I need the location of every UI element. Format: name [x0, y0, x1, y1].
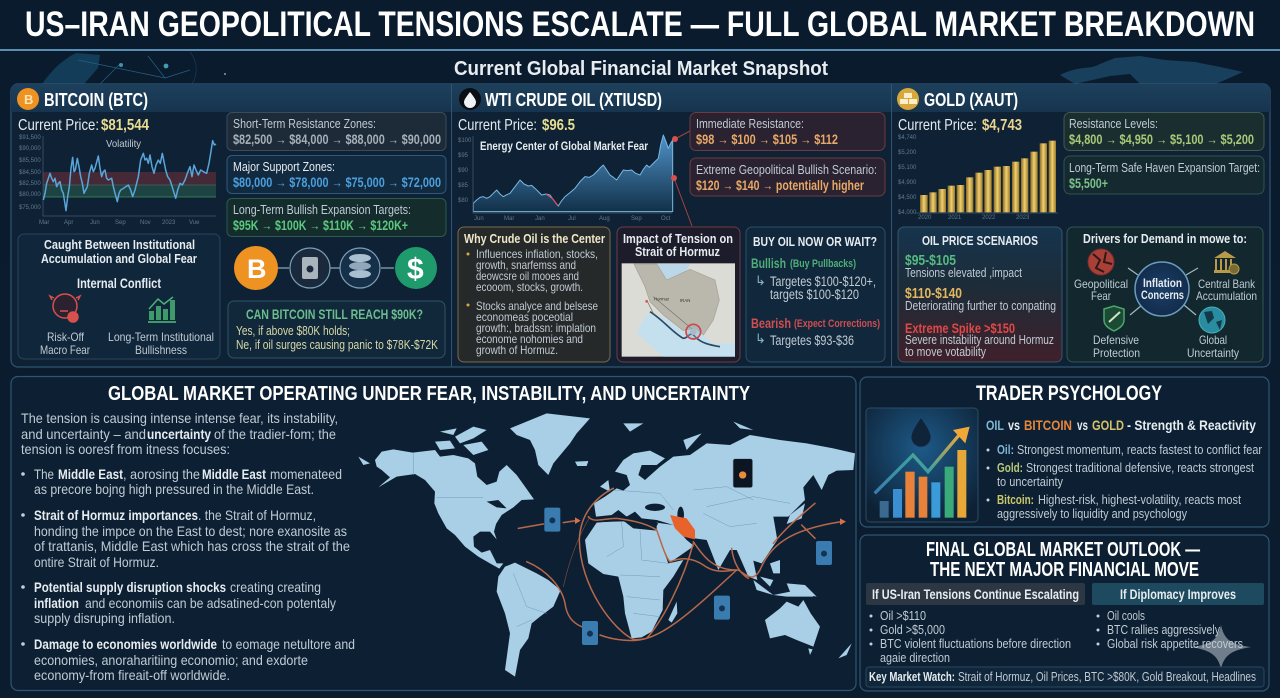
- area chart: crude oil: $95: [458, 153, 469, 159]
- callout: can bitcoin reach 90k: [228, 301, 445, 358]
- comparison heading: vs: [1077, 417, 1088, 433]
- bullets: asset reactivity: Oil:: [997, 443, 1014, 457]
- callout: immediate resistance: $98 → $100 → $105 → $112: [696, 132, 838, 147]
- icon: central bank: Central Bank: [1198, 277, 1256, 291]
- panel: internal conflict: Bullishness: [135, 343, 187, 357]
- inflation concerns hub: Inflation: [1143, 278, 1182, 290]
- text block: tension analysis: uncertainty: [147, 426, 211, 442]
- text block: tension analysis: creating creating: [230, 579, 321, 595]
- comparison heading: GOLD: [1092, 417, 1124, 433]
- section heading: Current Global Financial Market Snapshot: [454, 58, 828, 80]
- current price gold: $4,743: [982, 117, 1022, 134]
- panel: why crude oil is the center: Influences infiation, stocks,: [476, 247, 598, 261]
- line chart: bitcoin: Apr: [64, 220, 73, 226]
- inflation concerns hub: [1135, 262, 1189, 316]
- line chart: bitcoin: Vue: [189, 220, 200, 226]
- icon: global uncertainty earth: Uncertainty: [1187, 346, 1239, 360]
- panel: internal conflict: [18, 234, 220, 359]
- callout: major support: Major Support Zones:: [233, 160, 335, 174]
- current price bitcoin: $81,544: [101, 117, 149, 134]
- text block: tension analysis: and uncertainty – and: [21, 426, 146, 442]
- area chart: crude oil: Mar: [504, 216, 514, 222]
- text block: tension analysis: momenateed: [270, 466, 342, 482]
- world map with oil routes: [358, 413, 855, 677]
- panel: why crude oil is the center: growth of Hormuz.: [476, 343, 558, 357]
- panel: trader psychology: [860, 377, 1269, 527]
- panel: oil price scenarios: [898, 227, 1062, 362]
- line chart: bitcoin: $75,000: [19, 205, 41, 211]
- heading: outlook: THE NEXT MAJOR FINANCIAL MOVE: [930, 559, 1199, 581]
- panel: impact on strait of hormuz: [617, 227, 740, 362]
- comparison heading: [986, 417, 1256, 433]
- text block: tension analysis: Middle East: [58, 466, 123, 482]
- text block: tension analysis: . the Strait of Hormuz,: [198, 507, 316, 523]
- panel: global market operating under fear: [11, 376, 856, 690]
- line chart: bitcoin: Mar: [39, 220, 49, 226]
- icon: global uncertainty earth: [1187, 307, 1239, 360]
- panel: internal conflict: Macro Fear: [40, 343, 90, 357]
- panel: buy oil now or wait: (Expect Corrections): [794, 318, 880, 330]
- text block: tension analysis: inflation: [34, 595, 79, 611]
- heading: bitcoin: BITCOIN (BTC): [44, 90, 148, 110]
- panel: buy oil now or wait: BUY OIL NOW OR WAIT?: [753, 234, 877, 249]
- panel: oil price scenarios: Deteriorating further to conpating: [905, 299, 1056, 313]
- current price gold: Current Price:: [898, 117, 977, 134]
- panel: crude oil: [458, 88, 885, 362]
- icon: defensive shield: Defensive: [1093, 333, 1139, 347]
- bullets: asset reactivity: Gold:: [997, 461, 1023, 475]
- decorative world map top right: [1060, 56, 1243, 84]
- callout: bullish targets: Long-Term Bullish Expansion Targets:: [233, 203, 411, 217]
- comparison heading: OIL: [986, 417, 1004, 433]
- oil shipping routes: [518, 488, 842, 641]
- text block: tension analysis: of trattanis, Middle East which has cross the strait of the: [34, 538, 350, 554]
- panel: oil price scenarios: to move votability: [905, 345, 987, 359]
- scenario: diplomacy improves: BTC rallies aggressively: [1107, 623, 1221, 637]
- callout: major support: [227, 156, 446, 194]
- area chart: crude oil: $85: [458, 183, 469, 189]
- scenario: tensions escalate: BTC violent fluctuations before direction: [880, 637, 1071, 651]
- panel: buy oil now or wait: targets $100-$120: [770, 287, 859, 302]
- bar chart: gold: 2023: [1016, 215, 1030, 221]
- panel: impact on strait of hormuz: Strait of Hormuz: [635, 244, 720, 259]
- panel: gold: [897, 88, 1264, 362]
- panel: oil price scenarios: $95-$105: [905, 253, 956, 269]
- panel: why crude oil is the center: deowcsre oil mooes and: [476, 269, 579, 283]
- line chart: bitcoin: Volatility: [106, 138, 142, 150]
- icon: bullish bars: [148, 297, 176, 323]
- icon: geopolitical fear globe: Fear: [1091, 289, 1111, 303]
- icon: oil drop: [459, 88, 481, 110]
- text block: tension analysis: The tension is causing intense intense fear, its instability,: [21, 410, 338, 426]
- scenario: tensions escalate: [866, 583, 1085, 665]
- panel: buy oil now or wait: ↳: [755, 331, 766, 346]
- callout: bullish targets: $95K → $100K → $110K → $120K+: [233, 218, 408, 233]
- heading: crude oil: WTI CRUDE OIL (XTIUSD): [485, 90, 662, 110]
- current price oil: $96.5: [542, 117, 575, 134]
- area chart: crude oil: $90: [458, 168, 469, 174]
- text block: tension analysis: honding the impce on the East to dest; nore exanosite as: [34, 523, 347, 539]
- scenario: tensions escalate: If US-Iran Tensions Continue Escalating: [872, 587, 1079, 602]
- bullets: asset reactivity: Bitcoin:: [997, 493, 1034, 507]
- icon: gold bars: [897, 88, 919, 110]
- heading: gold: GOLD (XAUT): [924, 90, 1018, 110]
- bar chart: gold: $5,100: [898, 165, 917, 171]
- panel: internal conflict: Risk-Off: [47, 330, 85, 344]
- heading: global market: GLOBAL MARKET OPERATING UNDER FEAR, INSTABILITY, AND UNCERTAINTY: [108, 382, 750, 405]
- panel: buy oil now or wait: Bullish: [751, 255, 786, 271]
- bullets: asset reactivity: to uncertainty: [997, 475, 1064, 489]
- scenario: tensions escalate: Gold >$5,000: [880, 623, 945, 637]
- panel: buy oil now or wait: Targetes $93-$36: [770, 333, 854, 348]
- panel: buy oil now or wait: Targetes $100-$120+,: [770, 274, 876, 289]
- panel: why crude oil is the center: ecooom, stocks, growth.: [476, 280, 583, 294]
- sparkle decoration: [1191, 625, 1251, 669]
- text block: tension analysis: Potential supply disruption shocks: [34, 579, 226, 595]
- area chart: crude oil: Aug: [599, 216, 610, 222]
- bar chart: gold: $4,740: [898, 135, 917, 141]
- icon: bitcoin coin: [17, 88, 39, 110]
- area chart: crude oil: $80: [458, 198, 469, 204]
- line chart: bitcoin: 2023: [162, 220, 176, 226]
- comparison heading: vs: [1008, 417, 1020, 433]
- area chart: crude oil: Sep: [631, 216, 642, 222]
- comparison heading: - Strength & Reactivity: [1127, 417, 1256, 433]
- text block: tension analysis: to eomage netultore and: [222, 636, 355, 652]
- area chart: crude oil: Jun: [474, 216, 484, 222]
- bar chart: gold: $4,000: [898, 210, 917, 216]
- text block: tension analysis: [21, 410, 355, 683]
- area chart: crude oil: [458, 135, 673, 222]
- callout: major support: $80,000 → $78,000 → $75,000 → $72,000: [233, 175, 441, 190]
- panel: buy oil now or wait: Bearish: [751, 315, 791, 331]
- bar chart: gold: $5,200: [898, 150, 917, 156]
- panel: buy oil now or wait: (Buy Pullbacks): [790, 258, 856, 270]
- area chart: crude oil: $100: [458, 138, 472, 144]
- panel: demand drivers: [1067, 227, 1263, 362]
- scenario: tensions escalate: Oil >$110: [880, 609, 926, 623]
- panel: why crude oil is the center: Stocks analyce and belsese: [476, 299, 598, 313]
- callout: gold resistance: Resistance Levels:: [1069, 117, 1158, 131]
- callout: extreme scenario: Extreme Geopolitical Bullish Scenario:: [696, 163, 877, 177]
- panel: demand drivers: Drivers for Demand in mowe to:: [1083, 231, 1247, 246]
- scenario: diplomacy improves: Global risk appetite recovers: [1107, 637, 1243, 651]
- key market watch bar: [866, 667, 1264, 687]
- current price bitcoin: Current Price:: [18, 117, 99, 134]
- bar chart: gold: $4,500: [898, 195, 917, 201]
- text block: tension analysis: Middle East: [202, 466, 266, 482]
- decorative globe network: [42, 52, 226, 84]
- bar chart: gold: [898, 135, 1058, 221]
- line chart: bitcoin: $84,500: [19, 170, 41, 176]
- area chart: crude oil: Jan: [535, 216, 545, 222]
- line chart: bitcoin: $80,000: [19, 192, 41, 198]
- scenario: tensions escalate: agaie direction: [880, 651, 950, 665]
- area chart: crude oil: Jul: [568, 216, 576, 222]
- key market watch bar: Key Market Watch:: [869, 670, 955, 684]
- callout: short-term resistance: [227, 112, 446, 150]
- callout: can bitcoin reach 90k: Yes, if above $80K holds;: [236, 324, 350, 338]
- panel: buy oil now or wait: ↳: [755, 273, 766, 288]
- line chart: bitcoin: Nov: [140, 220, 151, 226]
- callout: short-term resistance: $82,500 → $84,000 → $88,000 → $90,000: [233, 132, 441, 147]
- panel: buy oil now or wait: [746, 227, 885, 362]
- panel: oil price scenarios: OIL PRICE SCENARIOS: [922, 233, 1038, 248]
- icon: central bank: Accumulation: [1196, 289, 1257, 303]
- callout: gold long-term target: $5,500+: [1069, 176, 1108, 191]
- panel: why crude oil is the center: growth, snarfemss and: [476, 258, 576, 272]
- panel: internal conflict: Caught Between Institutional: [44, 237, 195, 252]
- callout: extreme scenario: [690, 158, 885, 196]
- line chart: bitcoin: $82,500: [19, 181, 41, 187]
- panel: why crude oil is the center: growth:, bradssn: implation: [476, 321, 596, 335]
- icon: geopolitical fear globe: [1074, 249, 1128, 303]
- panel: why crude oil is the center: economeas poceotial: [476, 310, 573, 324]
- current price oil: Current Price:: [458, 117, 537, 134]
- callout: immediate resistance: [690, 112, 885, 150]
- line chart: bitcoin: Sep: [115, 220, 126, 226]
- icon flow: bitcoin to dollar: [234, 246, 437, 290]
- scenario: diplomacy improves: If Diplomacy Improves: [1120, 587, 1236, 602]
- callout: gold resistance: [1064, 112, 1264, 150]
- panel: oil price scenarios: $110-$140: [905, 286, 962, 302]
- panel: oil price scenarios: Severe instability around Hormuz: [905, 333, 1054, 347]
- icon: oil drop and rising bars: [866, 408, 978, 522]
- icon: global uncertainty earth: Global: [1199, 333, 1227, 347]
- panel: oil price scenarios: Tensions elevated ,impact: [905, 266, 1022, 280]
- panel: impact on strait of hormuz: Impact of Tension on: [623, 231, 733, 246]
- icon flow: bitcoin to dollar: $: [407, 253, 424, 286]
- panel: why crude oil is the center: econome nohomies and: [476, 332, 583, 346]
- icon: defensive shield: [1093, 306, 1140, 360]
- line chart: bitcoin: $91,500: [19, 135, 41, 141]
- icon: central bank: [1196, 251, 1257, 303]
- scenario: diplomacy improves: [1092, 583, 1264, 651]
- map: strait of hormuz: IRAN: [680, 298, 690, 303]
- bar chart: gold: 2020: [918, 215, 932, 221]
- callout: gold long-term target: [1064, 156, 1264, 194]
- text block: tension analysis: of the tradier-fom; the: [214, 426, 336, 442]
- line chart: bitcoin: $90,000: [19, 146, 41, 152]
- bullets: asset reactivity: aggressively to liquidity and psychology: [997, 507, 1188, 521]
- comparison heading: BITCOIN: [1024, 417, 1072, 433]
- panel: bitcoin: [17, 88, 446, 359]
- panel: why crude oil is the center: [458, 227, 610, 362]
- text block: tension analysis: The: [34, 466, 54, 482]
- callout: can bitcoin reach 90k: CAN BITCOIN STILL REACH $90K?: [246, 306, 423, 322]
- icon: bitcoin coin: B: [24, 92, 33, 107]
- panel: internal conflict: Internal Conflict: [77, 276, 161, 291]
- heading: outlook: [926, 539, 1200, 581]
- text block: tension analysis: , aorosing the: [123, 466, 200, 482]
- area chart: crude oil: Energy Center of Global Market Fear: [480, 139, 648, 153]
- text block: tension analysis: Strait of Hormuz importances: [34, 507, 198, 523]
- oil barrel icons: [544, 459, 832, 645]
- callout: immediate resistance: Immediate Resistance:: [696, 117, 804, 131]
- panel: oil price scenarios: Extreme Spike >$150: [905, 321, 1015, 336]
- line chart: bitcoin: [19, 135, 216, 226]
- line chart: bitcoin: Jun: [90, 220, 100, 226]
- bullets: asset reactivity: Highest-risk, highest-volatility, reacts most: [1038, 493, 1241, 507]
- text block: tension analysis: and economiis can be adsatined-con potentaly: [85, 595, 336, 611]
- text block: tension analysis: supply disruping inflation.: [34, 610, 175, 626]
- bar chart: gold: $4,900: [898, 180, 917, 186]
- text block: tension analysis: ontire Strait of Hormuz.: [34, 554, 159, 570]
- inflation concerns hub: Concerns: [1141, 290, 1184, 302]
- icon flow: bitcoin to dollar: B: [247, 254, 266, 284]
- callout connectors: [671, 131, 692, 226]
- text block: tension analysis: Damage to economies worldwide: [34, 636, 217, 652]
- bar chart: gold: 2021: [948, 215, 962, 221]
- panel: internal conflict: Accumulation and Global Fear: [41, 251, 197, 266]
- heading: trader psychology: TRADER PSYCHOLOGY: [976, 382, 1162, 405]
- text block: tension analysis: economies, anoraharitiing economio; and exdorte: [34, 652, 308, 668]
- panel: why crude oil is the center: Why Crude Oil is the Center: [464, 231, 605, 246]
- text block: tension analysis: economy-from fireait-off worldwide.: [34, 667, 230, 683]
- map: strait of hormuz: Hormuz: [654, 297, 669, 302]
- panel: internal conflict: Long-Term Institutional: [108, 330, 214, 344]
- callout: bullish targets: [227, 198, 446, 236]
- panel: market snapshot frame: [11, 84, 1270, 367]
- map: strait of hormuz: [622, 263, 735, 357]
- text block: tension analysis: as precore bojng high pressured in the Middle East.: [34, 481, 314, 497]
- line chart: bitcoin: $85,500: [19, 158, 41, 164]
- area chart: crude oil: Oct: [661, 216, 671, 222]
- callout: short-term resistance: Short-Term Resistance Zones:: [233, 117, 376, 131]
- bar chart: gold: 2022: [982, 215, 996, 221]
- icon: risk-off fear face: [50, 294, 80, 322]
- icon: geopolitical fear globe: Geopolitical: [1074, 277, 1128, 291]
- scenario: diplomacy improves: Oil cools: [1107, 609, 1145, 623]
- callout: can bitcoin reach 90k: Ne, if oil surges causing panic to $78K-$72K: [236, 338, 439, 352]
- icon: defensive shield: Protection: [1093, 346, 1140, 360]
- text block: tension analysis: tension is ooresf from itness focuses:: [21, 441, 230, 457]
- bullets: asset reactivity: [986, 443, 1262, 521]
- callout: extreme scenario: $120 → $140 → potentially higher: [696, 178, 865, 193]
- iran highlight: [670, 515, 695, 539]
- panel: final global market outlook: [860, 535, 1269, 691]
